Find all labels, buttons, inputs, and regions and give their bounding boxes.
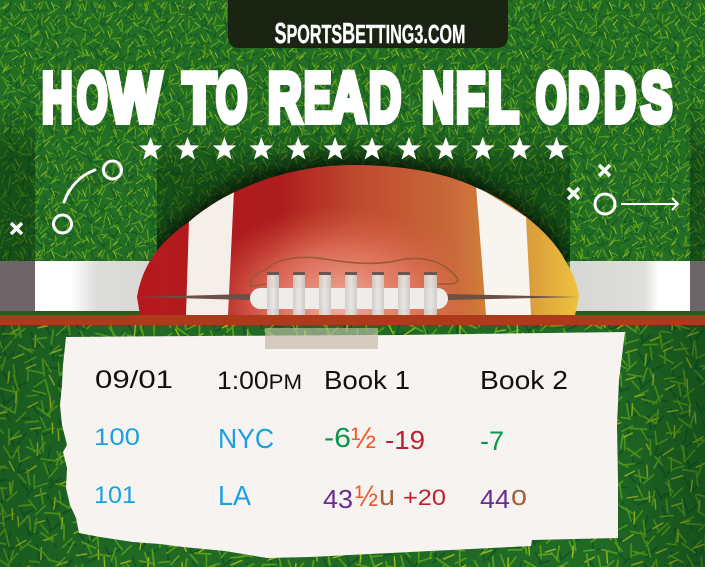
row of stars (139, 137, 568, 160)
team rows: LA (218, 480, 251, 511)
lace stitches (267, 272, 437, 315)
play diagram right (568, 165, 678, 214)
football (137, 165, 579, 315)
title: W (108, 58, 161, 136)
title: D (369, 58, 401, 136)
torn paper note (60, 332, 625, 558)
site name: SPORTSBETTING3.COM (274, 18, 466, 50)
left stripe (186, 190, 234, 315)
title: F (456, 58, 485, 136)
header row: 1:00PM (217, 367, 302, 395)
Book 1 NYC line: -19 (385, 425, 425, 455)
team rows (94, 423, 274, 511)
seam (137, 294, 579, 300)
team rows: NYC (218, 423, 274, 454)
header tab (228, 0, 508, 50)
lace outline (250, 257, 458, 287)
football shadow (157, 143, 570, 262)
header row: Book 1 (324, 365, 410, 395)
Book 2 NYC line: -7 (480, 426, 504, 456)
title: A (331, 58, 366, 136)
Book 2 LA line (480, 480, 527, 514)
title: O (77, 58, 108, 136)
title: T (183, 58, 216, 136)
yard line white band (0, 261, 705, 315)
Book 1 LA line: u (379, 480, 395, 512)
team rows: 100 (94, 424, 140, 451)
title: R (268, 58, 302, 136)
Book 1 NYC line: ½ (351, 422, 376, 455)
Book 1 LA line: ½ (355, 480, 378, 513)
title: N (422, 58, 454, 136)
Book 1 LA line (323, 480, 446, 514)
title: O (216, 58, 247, 136)
title: D (568, 58, 599, 136)
play diagram left (11, 161, 122, 234)
right stripe (476, 186, 531, 315)
title: H (42, 58, 72, 136)
Book 1 NYC line: -6 (324, 422, 351, 453)
title: D (604, 58, 636, 136)
Book 2 LA line: o (511, 480, 527, 512)
lace bar (250, 288, 448, 309)
header row (95, 365, 568, 395)
title: S (641, 58, 672, 136)
Book 1 LA line: 43 (323, 484, 353, 514)
title: L (488, 58, 518, 136)
header row: 09/01 (95, 366, 173, 394)
stitch tops (267, 272, 437, 275)
header row: Book 2 (480, 365, 568, 395)
title: E (304, 58, 331, 136)
Book 1 NYC line (324, 422, 425, 455)
tape (265, 328, 378, 349)
Book 1 LA line: +20 (403, 485, 446, 510)
odds table (94, 365, 568, 514)
red ground stripe (0, 315, 705, 325)
team rows: 101 (94, 482, 136, 509)
title: O (536, 58, 566, 136)
Book 2 LA line: 44 (480, 484, 510, 514)
